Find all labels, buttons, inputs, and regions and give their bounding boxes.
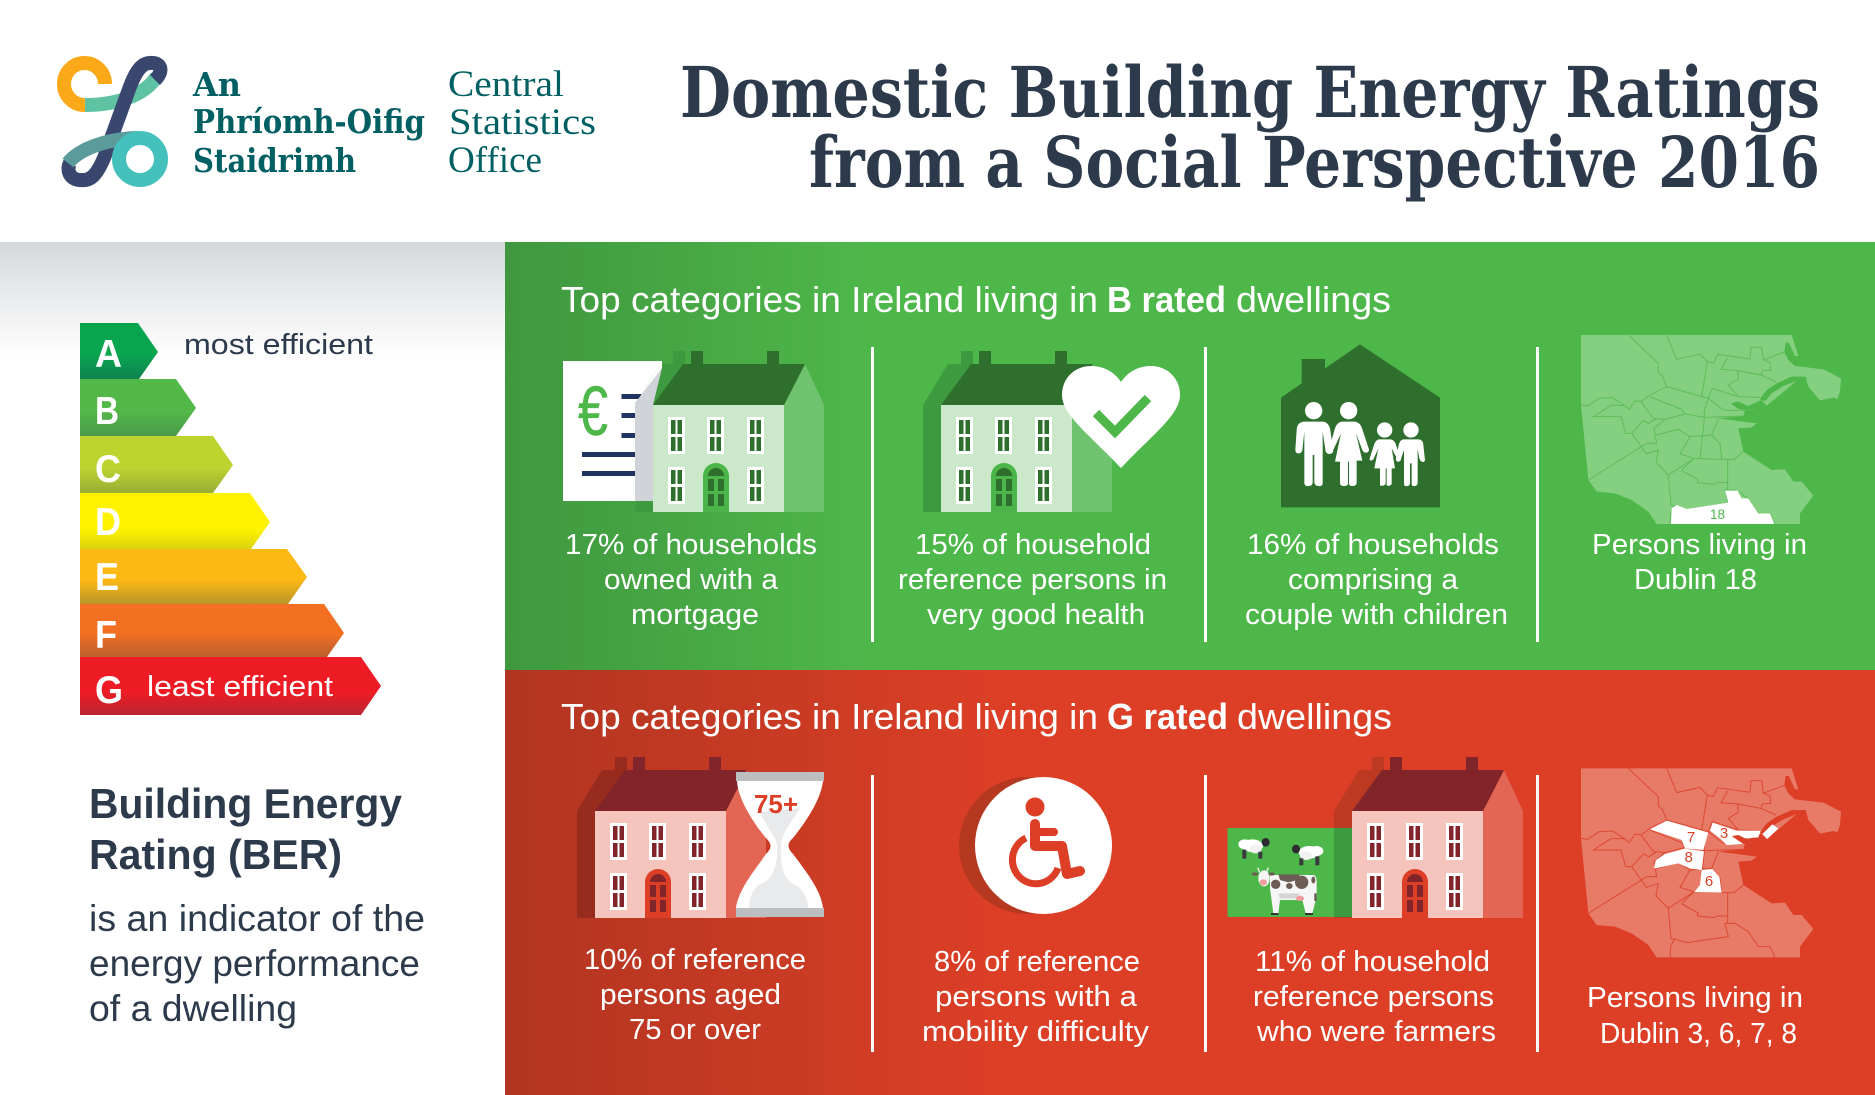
icon: house and 75+ hourglass: 75+: [754, 789, 798, 819]
BER description: of a dwelling: [89, 988, 297, 1029]
logo English name: Statistics: [449, 102, 596, 143]
green heading: [561, 279, 1391, 320]
energy rating arrows: B: [95, 390, 119, 433]
header background: [0, 0, 1875, 242]
logo Irish name: Phríomh-Oifig: [193, 102, 425, 141]
BER heading: Rating (BER): [89, 831, 342, 878]
panel: B rated dwellings: [505, 242, 1875, 670]
most efficient label: most efficient: [184, 329, 373, 361]
energy rating arrows: [80, 323, 381, 715]
logo English name: [448, 64, 596, 181]
panel: G rated dwellings: [505, 670, 1875, 1095]
least efficient label: least efficient: [147, 671, 333, 703]
caption: aged 75 or over: 75 or over: [629, 1014, 761, 1046]
caption: Dublin 3, 6, 7, 8: [1587, 982, 1803, 1050]
caption: aged 75 or over: [584, 944, 806, 1046]
red heading: dwellings: [1237, 696, 1392, 737]
icon: mortgage document and house: €: [578, 372, 608, 450]
logo Irish name: An: [192, 65, 241, 104]
caption: Dublin 3, 6, 7, 8: Dublin 3, 6, 7, 8: [1600, 1018, 1797, 1050]
logo English name: Central: [448, 64, 564, 105]
BER heading: Building Energy: [89, 780, 403, 827]
caption: mortgage: 17% of households: [565, 529, 817, 561]
caption: couple with children: comprising a: [1288, 564, 1459, 596]
icon: wheelchair: [959, 777, 1112, 914]
icon: mortgage document and house: [563, 351, 824, 512]
icon: house and 75+ hourglass: [577, 757, 824, 918]
red heading: Top categories in Ireland living in: [561, 696, 1098, 737]
panel: BER legend: [0, 242, 505, 1029]
legend top shading: [0, 242, 505, 357]
energy rating arrows: C: [95, 448, 121, 491]
logo Irish name: [192, 65, 425, 180]
caption: couple with children: couple with children: [1245, 599, 1508, 631]
logo Irish name: Staidrimh: [193, 141, 356, 180]
caption: Dublin 18: Dublin 18: [1634, 564, 1757, 596]
logo: Central Statistics Office: [64, 63, 596, 181]
map: Dublin 3, 6, 7, 8 highlighted: 6: [1705, 873, 1713, 890]
caption: mortgage: [565, 529, 817, 631]
BER heading: [89, 780, 403, 878]
caption: mortgage: mortgage: [631, 599, 759, 631]
map: Dublin 3, 6, 7, 8 highlighted: [1581, 768, 1841, 957]
caption: very good health: reference persons in: [898, 564, 1167, 596]
BER description: [89, 898, 425, 1029]
green heading: dwellings: [1236, 279, 1391, 320]
caption: farmers: reference persons: [1253, 981, 1494, 1013]
map: Dublin 3, 6, 7, 8 highlighted: 3: [1720, 825, 1728, 842]
caption: Dublin 18: [1592, 529, 1807, 596]
caption: aged 75 or over: persons aged: [600, 979, 781, 1011]
map: Dublin 18 highlighted: 18: [1710, 507, 1725, 522]
caption: Dublin 18: Persons living in: [1592, 529, 1807, 561]
caption: mobility difficulty: mobility difficulty: [922, 1016, 1150, 1048]
energy rating arrows: A: [95, 333, 122, 376]
caption: couple with children: 16% of households: [1247, 529, 1499, 561]
green heading: Top categories in Ireland living in: [561, 279, 1098, 320]
logo English name: Office: [448, 140, 542, 181]
map: Dublin 18 highlighted: [1581, 335, 1841, 524]
caption: mobility difficulty: persons with a: [935, 981, 1138, 1013]
energy rating arrows: E: [95, 556, 119, 599]
energy rating arrows: G: [95, 669, 123, 712]
caption: very good health: [898, 529, 1167, 631]
caption: farmers: 11% of household: [1255, 946, 1490, 978]
caption: Dublin 3, 6, 7, 8: Persons living in: [1587, 982, 1803, 1014]
caption: very good health: 15% of household: [915, 529, 1151, 561]
icon: farm animals and house: [1228, 757, 1523, 918]
logo mark: [64, 63, 161, 180]
icon: cow: [1252, 868, 1317, 915]
caption: mortgage: owned with a: [604, 564, 779, 596]
BER description: energy performance: [89, 943, 420, 984]
red panel background: [505, 670, 1875, 1095]
icon: house and heart: [923, 351, 1180, 512]
title: [680, 51, 1820, 204]
caption: farmers: who were farmers: [1256, 1016, 1496, 1048]
caption: mobility difficulty: 8% of reference: [934, 946, 1140, 978]
red heading: [561, 696, 1392, 737]
green panel background: [505, 242, 1875, 670]
caption: farmers: [1253, 946, 1496, 1048]
caption: very good health: very good health: [927, 599, 1145, 631]
energy rating arrows: F: [95, 614, 117, 657]
map: Dublin 3, 6, 7, 8 highlighted: 8: [1685, 849, 1693, 866]
BER description: is an indicator of the: [89, 898, 425, 939]
red heading: G rated: [1107, 696, 1228, 737]
caption: aged 75 or over: 10% of reference: [584, 944, 806, 976]
map: Dublin 3, 6, 7, 8 highlighted: 7: [1687, 829, 1695, 846]
green heading: B rated: [1107, 279, 1226, 320]
caption: couple with children: [1245, 529, 1508, 631]
energy rating arrows: D: [95, 501, 121, 544]
caption: mobility difficulty: [922, 946, 1150, 1048]
icon: family in house: [1281, 344, 1440, 507]
icon: sheep right: [1292, 845, 1323, 865]
icon: sheep left: [1238, 838, 1270, 859]
